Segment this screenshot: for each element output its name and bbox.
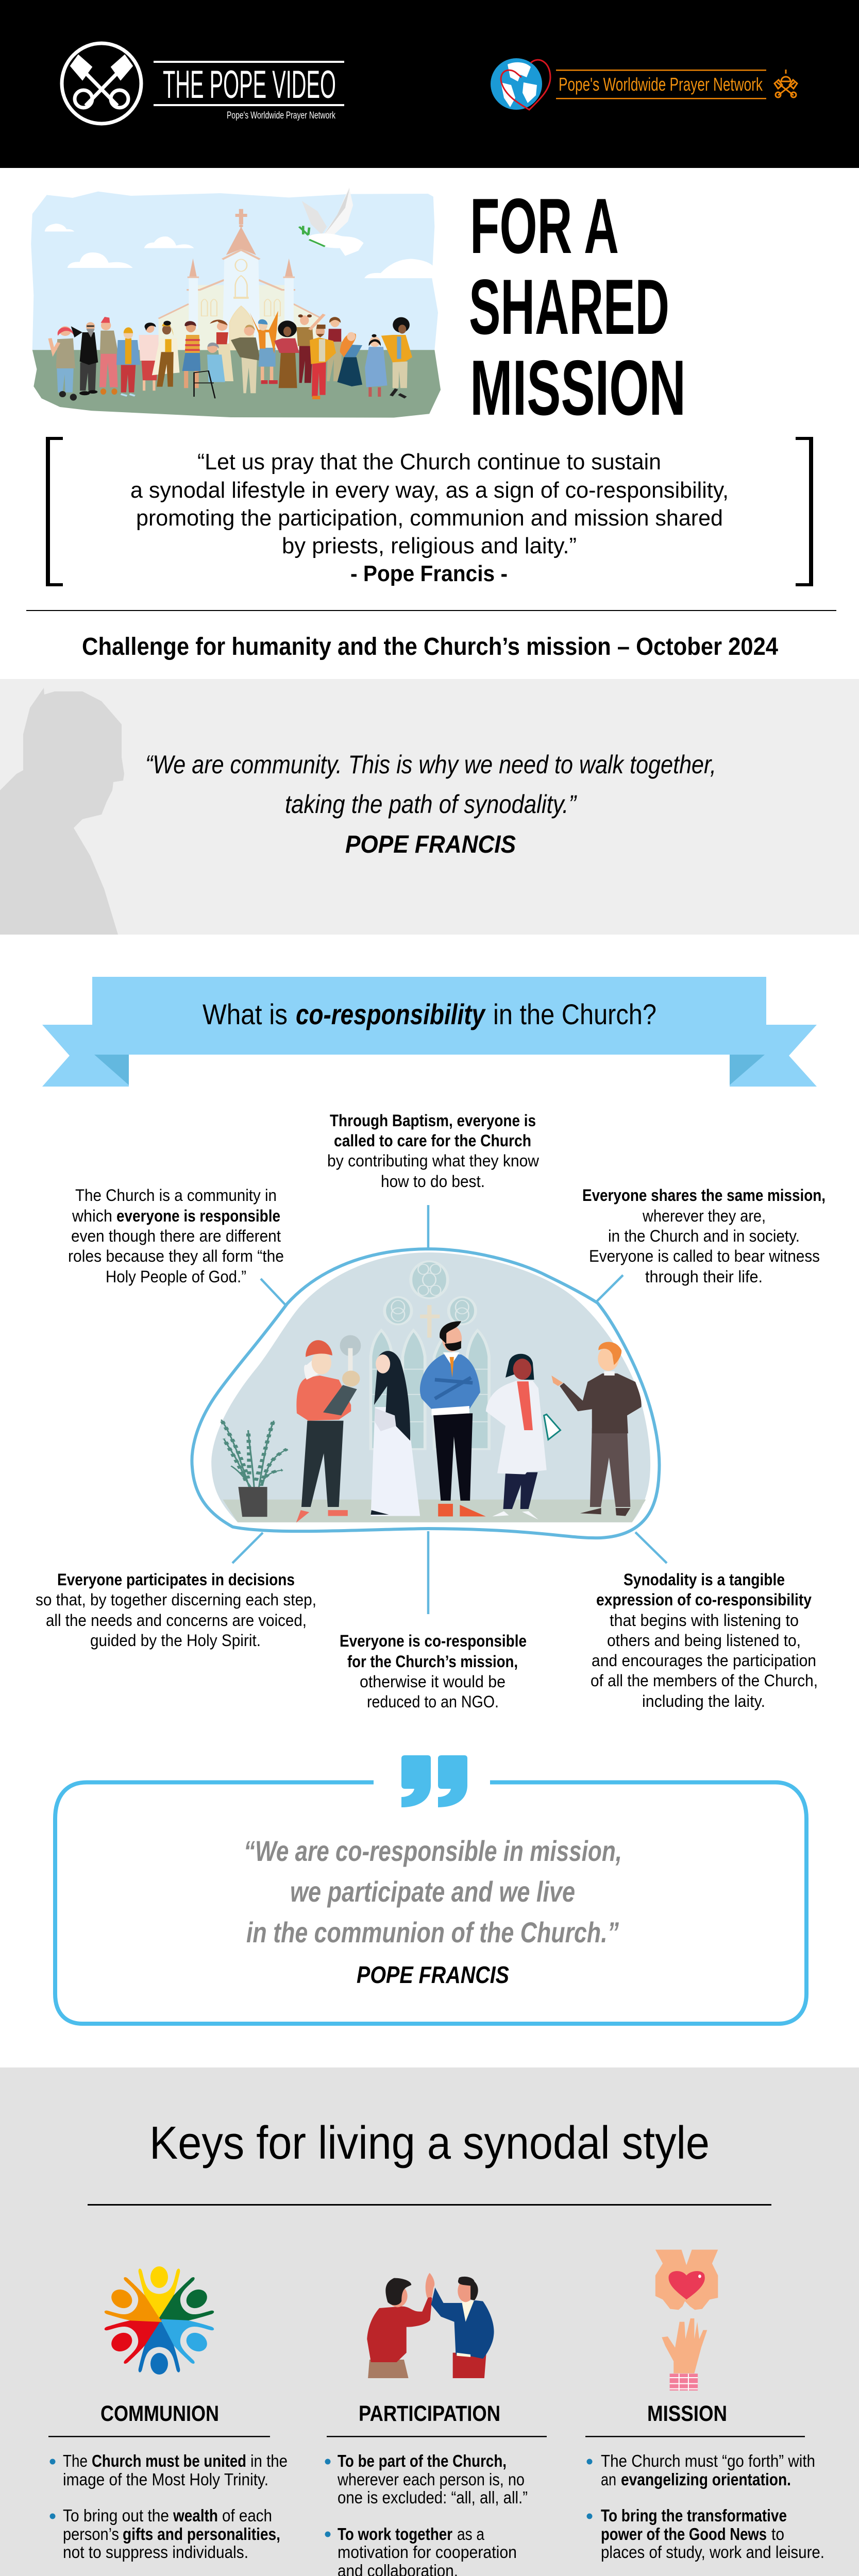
text: decisions: all the needs and concerns are voiced, (46, 1611, 307, 1630)
quote text: POPE FRANCIS (345, 831, 516, 858)
blob outline (192, 1249, 659, 1538)
person: woman with red top (210, 320, 233, 381)
header band (0, 0, 859, 168)
cross (420, 1305, 440, 1337)
column: communion: person’s (63, 2524, 119, 2544)
text: synodality: Synodality is a tangible (624, 1570, 785, 1589)
candle (340, 1335, 361, 1386)
text: synodality (591, 1570, 818, 1710)
column: mission: power of the Good News (601, 2524, 767, 2544)
person: man with afro and yellow jacket (381, 317, 412, 398)
column: communion (48, 2401, 290, 2576)
title: MISSION (470, 344, 686, 432)
text: synodality: including the laity. (642, 1692, 765, 1710)
panel: co-responsible quote (55, 1755, 806, 2024)
text: baptism (327, 1111, 540, 1191)
crowd of people (50, 311, 412, 401)
text: synodality: others and being listened to, (607, 1631, 801, 1650)
panel: Pope Francis quote (0, 679, 859, 935)
text: baptism: by contributing what they know (327, 1151, 540, 1170)
text: community: which (72, 1207, 112, 1225)
text: same mission: wherever they are, (642, 1207, 766, 1225)
quote text: promoting the participation, communion and mission shared (136, 505, 723, 531)
quote text: taking the path of synodality.” (285, 790, 577, 819)
ribbon banner heading (42, 977, 817, 1087)
column: communion: Church must be united (92, 2451, 246, 2470)
icon: Pope silhouette (0, 688, 124, 935)
quote text: “We are community. This is why we need to walk together, (145, 750, 716, 779)
text: same mission: through their life. (645, 1267, 763, 1286)
quote text: we participate and we live (290, 1875, 575, 1908)
text: community: everyone is responsible (116, 1207, 280, 1225)
room background (211, 1252, 650, 1522)
title: FOR A (470, 182, 619, 270)
heading: Keys for living a synodal style (149, 2117, 710, 2169)
quote text: - Pope Francis - (350, 561, 508, 586)
column: communion: To bring out the (63, 2506, 169, 2525)
column: communion: The (63, 2451, 88, 2470)
illustration: people in a church (192, 1249, 659, 1538)
connector lines (232, 1205, 667, 1614)
person: child in long blue dress (365, 334, 388, 397)
column: mission: evangelizing orientation. (621, 2470, 791, 2489)
sky (31, 192, 438, 350)
hero illustration: church and crowd (31, 187, 441, 418)
quote text (244, 1835, 622, 1988)
column: participation: motivation for cooperation (338, 2543, 517, 2562)
person: man with red hair (99, 317, 119, 395)
column: mission: MISSION (647, 2401, 727, 2426)
column: participation (325, 2401, 547, 2576)
icon: orange keys and tiara (774, 70, 797, 97)
text: decisions: Everyone participates in decisions (57, 1570, 295, 1589)
column: mission: an (601, 2470, 616, 2489)
person: olive sweater (231, 325, 260, 393)
icon: hands with heart (655, 2250, 718, 2391)
person: doctor (486, 1354, 561, 1519)
person: bearded man with yellow jacket (310, 325, 336, 399)
person: priest (551, 1342, 642, 1516)
text: same mission: in the Church and in society. (608, 1227, 800, 1245)
ribbon banner heading: in the Church? (493, 998, 656, 1030)
column: communion: COMMUNION (100, 2401, 219, 2426)
column: participation: To be part of the Church, (338, 2451, 507, 2470)
text: community: roles because they all form “the (68, 1247, 284, 1265)
person: cream coat and brown trousers (152, 321, 179, 387)
quote text (130, 449, 729, 586)
quote text: a synodal lifestyle in every way, as a sign of co-responsibility, (130, 478, 729, 503)
dove with olive branch (299, 187, 364, 256)
quote text: “We are co-responsible in mission, (244, 1835, 622, 1867)
text: co-responsible: Everyone is co-responsible (340, 1632, 527, 1650)
ribbon banner heading: What is (203, 998, 288, 1030)
logo: globe and heart (491, 58, 550, 110)
column: communion: not to suppress individuals. (63, 2543, 248, 2562)
title: SHARED (469, 263, 669, 351)
prayer quote with brackets (46, 437, 813, 586)
floor (223, 1500, 646, 1522)
icon: high five (367, 2273, 494, 2378)
clouds (45, 224, 434, 278)
person: boy with yellow hat (116, 327, 140, 396)
text: synodality: that begins with listening to (610, 1611, 799, 1630)
challenge heading: Challenge for humanity and the Church’s mission – October 2024 (82, 633, 778, 660)
person: woman with pink hair (50, 326, 77, 401)
logo wordmark: THE POPE VIDEO (163, 63, 336, 107)
logo: Pope's Worldwide Prayer Network: Pope's Worldwide Prayer Network (559, 74, 763, 95)
title (469, 182, 686, 432)
quote text: POPE FRANCIS (357, 1961, 509, 1988)
text: community (68, 1186, 284, 1286)
column: participation: PARTICIPATION (359, 2401, 500, 2426)
text: baptism: Through Baptism, everyone is (330, 1111, 536, 1130)
quote text: “Let us pray that the Church continue to sustain (197, 449, 661, 474)
frame (55, 1783, 806, 2024)
column: communion: in the (250, 2451, 288, 2470)
text: community: Holy People of God.” (106, 1267, 246, 1286)
column: communion: wealth (173, 2506, 218, 2525)
text: baptism: called to care for the Church (334, 1131, 531, 1150)
panel: keys for living a synodal style (0, 2067, 859, 2576)
column: participation: as a (457, 2524, 485, 2544)
text: co-responsible: for the Church’s mission, (347, 1652, 518, 1671)
person: woman with maroon top (327, 317, 343, 381)
ribbon banner heading: co-responsibility (296, 998, 486, 1030)
person: woman with orange hair (338, 332, 362, 386)
person: striped shirt with blue shorts (182, 321, 200, 388)
text: synodality: and encourages the participation (592, 1651, 816, 1670)
person: grandmother with walker (194, 343, 225, 398)
column: mission (585, 2401, 824, 2576)
text: decisions (36, 1570, 316, 1650)
person: bearded man in black (71, 322, 98, 395)
text: decisions: so that, by together discerning each step, (36, 1590, 316, 1609)
text: same mission: Everyone is called to bear witness (589, 1247, 820, 1265)
logo: The Pope Video keys (62, 43, 141, 124)
right bracket (796, 437, 813, 586)
left bracket (46, 437, 63, 586)
icon: communion figures (102, 2266, 216, 2375)
quote text (145, 750, 716, 858)
text: baptism: how to do best. (381, 1172, 485, 1191)
quote text: in the communion of the Church.” (246, 1916, 619, 1948)
column: mission: To bring the transformative (601, 2506, 787, 2525)
window tracery (370, 1264, 489, 1422)
column: mission: The Church must “go forth” with (601, 2451, 815, 2470)
text: co-responsible: otherwise it would be (360, 1672, 506, 1691)
icon: quotation marks (401, 1755, 467, 1807)
text: synodality: of all the members of the Church, (591, 1671, 818, 1690)
column: communion: image of the Most Holy Trinity. (63, 2470, 268, 2489)
text: community: even though there are different (71, 1227, 281, 1245)
church (159, 209, 320, 350)
text: co-responsible (340, 1632, 527, 1711)
text: community: The Church is a community in (75, 1186, 277, 1205)
person: engineer (296, 1340, 357, 1523)
quote text: by priests, religious and laity.” (282, 533, 577, 558)
text: co-responsible: reduced to an NGO. (367, 1692, 499, 1711)
plant in pot (221, 1420, 288, 1517)
column: participation: wherever each person is, no (337, 2470, 525, 2489)
person: blue hair with orange jacket (250, 311, 278, 382)
column: participation: one is excluded: “all, all, all.” (338, 2488, 528, 2507)
column: mission: to (771, 2524, 784, 2544)
logo wordmark (154, 61, 344, 121)
text: decisions: guided by the Holy Spirit. (90, 1631, 261, 1650)
text: synodality: expression of co-responsibility (596, 1590, 812, 1609)
text: same mission: Everyone shares the same mission, (582, 1186, 826, 1205)
logo wordmark: Pope's Worldwide Prayer Network (227, 110, 335, 121)
text: same mission (582, 1186, 826, 1286)
column: participation: To work together (338, 2524, 452, 2544)
ground (32, 350, 441, 418)
column: communion: gifts and personalities, (123, 2524, 280, 2544)
person: woman with buns (297, 314, 324, 383)
person: man in blue sweater (420, 1321, 486, 1516)
person: woman with afro and brown skirt (274, 320, 299, 388)
person: pink top with red skirt (139, 323, 159, 391)
person: nun (370, 1351, 420, 1516)
column: communion: of each (222, 2506, 272, 2525)
windows (370, 1261, 489, 1449)
column: mission: places of study, work and leisure. (601, 2543, 824, 2562)
